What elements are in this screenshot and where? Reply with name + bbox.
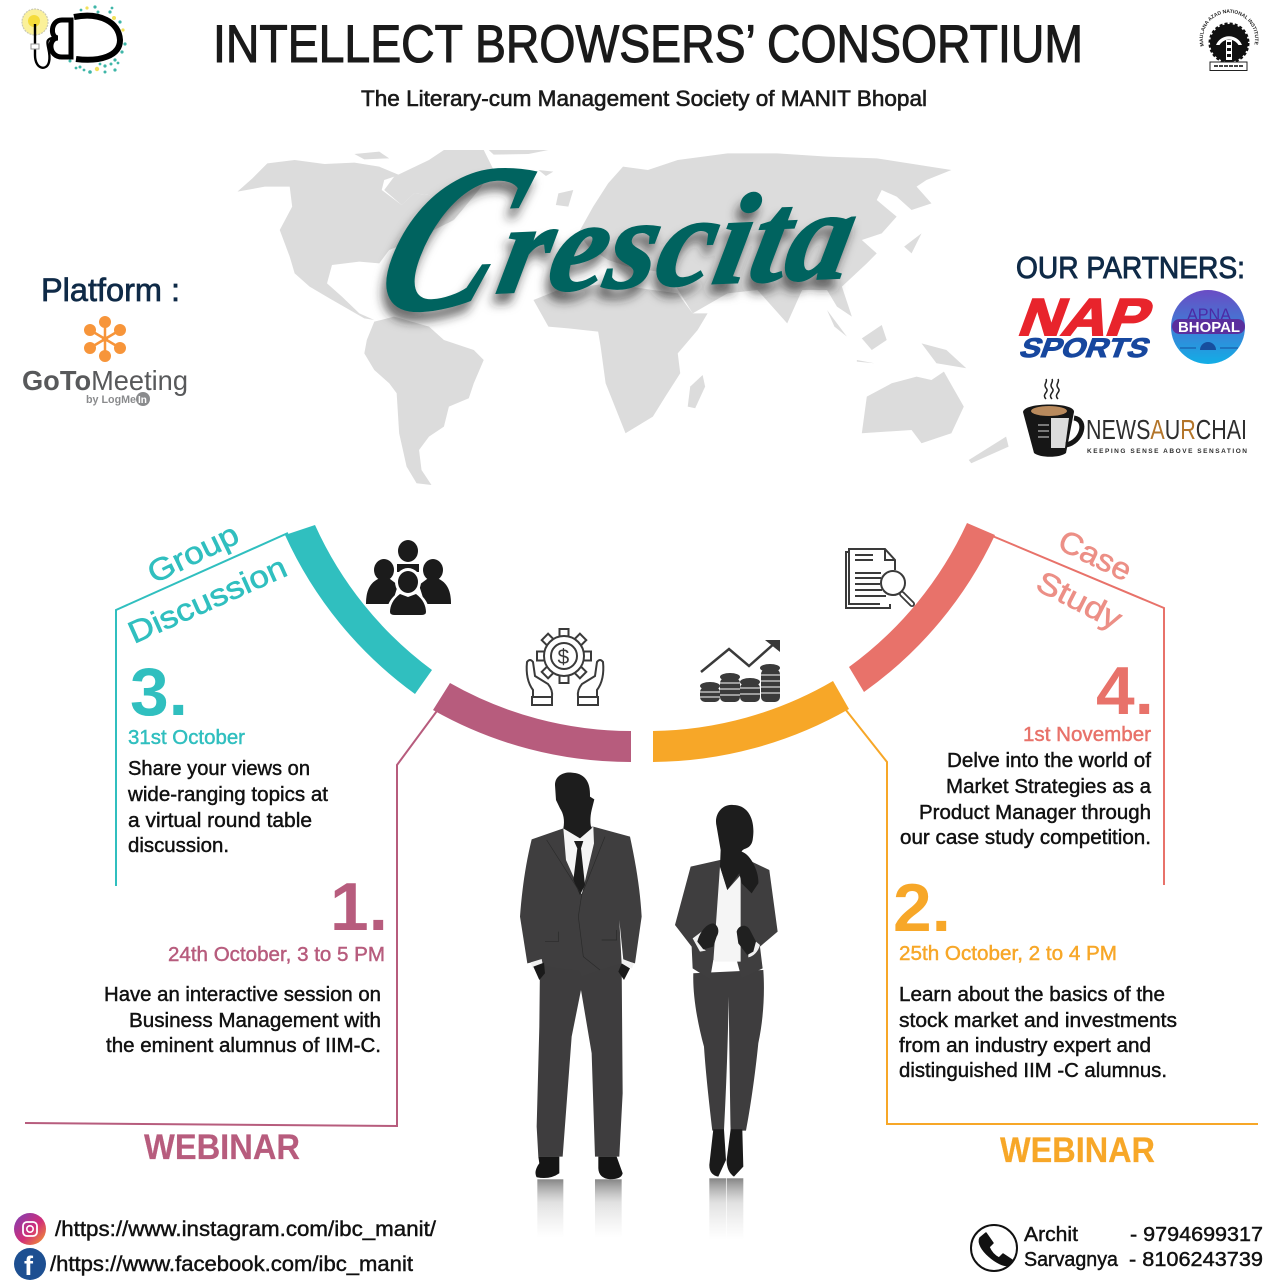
logo: News Aur Chai: NEWSAURCHAI [1086,414,1247,445]
logo: Apna Bhopal: BHOPAL [1178,319,1240,336]
contact details: - 8106243739 [1129,1248,1263,1271]
arc: orange [653,681,849,762]
social links [14,1213,436,1280]
panel: webinar 2 [838,700,1258,1170]
panel: webinar 2: from an industry expert and [899,1034,1151,1057]
panel: group discussion: Share your views on [128,757,310,780]
panel: webinar 1: Business Management with [129,1009,381,1032]
emblem: MANIT [1200,9,1258,71]
illustration: man [520,772,642,1238]
contact details: Sarvagnya [1024,1248,1119,1271]
panel: case study [900,523,1164,885]
panel: group discussion: Group [142,516,244,590]
logo: GoToMeeting: In [138,395,147,406]
panel: webinar 2: distinguished IIM -C alumnus. [899,1059,1167,1082]
panel: webinar 1: WEBINAR [144,1128,300,1167]
wordmark: Crescita [348,119,869,358]
icon: document with magnifier [846,549,912,608]
panel: group discussion: a virtual round table [128,809,312,832]
social links: /https://www.instagram.com/ibc_manit/ [55,1218,436,1241]
logo: IBC bulb and mouse [22,5,127,74]
panel: case study: our case study competition. [900,826,1151,849]
logo: Apna Bhopal [1171,290,1245,364]
panel: webinar 2: 25th October, 2 to 4 PM [899,942,1117,965]
logo: GoToMeeting [22,316,188,406]
logo: NAP Sports: SPORTS [1016,333,1155,363]
title: INTELLECT BROWSERS’ CONSORTIUM [213,15,1083,74]
contact details: - 9794699317 [1130,1223,1263,1246]
panel: case study: 4. [1096,653,1154,729]
logo: NAP Sports: NAP [1012,289,1161,347]
contact details: Archit [1024,1223,1078,1246]
icon: rising coins chart [700,640,780,702]
social links: /https://www.facebook.com/ibc_manit [50,1253,413,1276]
panel: group discussion: discussion. [128,834,229,857]
panel: group discussion: 3. [130,654,188,730]
contact details [971,1223,1263,1271]
panel: case study: 1st November [1023,723,1151,746]
panel: group discussion: wide-ranging topics at [127,783,328,806]
logo: Apna Bhopal: APNA [1187,305,1232,324]
panel: webinar 2: Learn about the basics of the [899,983,1165,1006]
partners heading: OUR PARTNERS: [1016,250,1245,285]
panel: case study: Product Manager through [919,801,1151,824]
illustration: woman [675,805,778,1240]
panel: group discussion: Discussion [123,549,292,650]
logo: News Aur Chai: KEEPING SENSE ABOVE SENSATION [1087,448,1247,455]
panel: case study: Delve into the world of [947,749,1151,772]
logo: News Aur Chai [1023,379,1247,457]
panel: webinar 2: 2. [893,870,951,946]
panel: case study: Case [1053,523,1137,588]
logo: GoToMeeting: GoToMeeting [22,365,188,396]
icon: dollar gear in hands [527,629,603,705]
icon: group of people [366,540,451,618]
logo: GoToMeeting: by LogMe [86,394,136,406]
wordmark: Crescita: rescita [488,163,869,322]
wordmark: Crescita: C [348,119,557,358]
panel: webinar 1: the eminent alumnus of IIM-C. [106,1034,381,1057]
world map [237,150,1009,485]
panel: case study: Study [1031,564,1128,637]
subtitle: The Literary-cum Management Society of MANIT Bhopal [361,86,927,111]
arc: pink [433,683,631,762]
logo: NAP Sports [1012,289,1161,363]
panel: case study: Market Strategies as a [946,775,1152,798]
panel: webinar 2: WEBINAR [1000,1131,1155,1170]
arc: salmon [849,523,995,692]
platform heading: Platform : [41,272,180,308]
panel: webinar 1: 1. [330,869,388,945]
arc: teal [285,525,432,694]
panel: webinar 1 [25,700,445,1167]
panel: group discussion: 31st October [128,726,245,749]
panel: webinar 1: 24th October, 3 to 5 PM [168,943,385,966]
icon: dollar gear in hands: $ [558,646,570,669]
panel: webinar 1: Have an interactive session on [104,983,381,1006]
panel: group discussion [116,516,328,886]
panel: webinar 2: stock market and investments [899,1009,1177,1032]
